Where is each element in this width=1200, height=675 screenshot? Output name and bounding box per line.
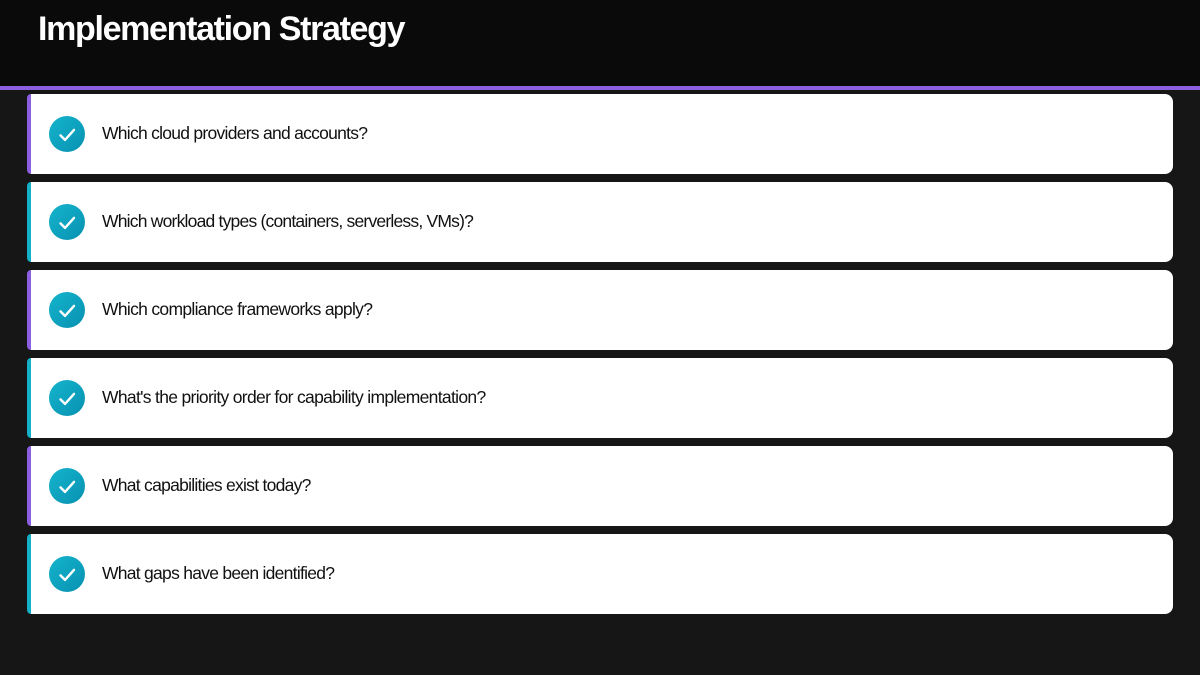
question text: Which workload types (containers, serverless, VMs)? xyxy=(102,211,473,231)
panel: card 3 xyxy=(27,270,1173,350)
question text: Which compliance frameworks apply? xyxy=(102,299,372,319)
icon: check circle xyxy=(49,380,85,416)
panel: card 1 xyxy=(27,94,1173,174)
panel: card 5 xyxy=(27,446,1173,526)
icon: check circle xyxy=(49,556,85,592)
question text: What's the priority order for capability implementation? xyxy=(102,387,486,407)
header bar xyxy=(0,0,1200,90)
icon: check circle xyxy=(49,292,85,328)
panel: card 2 xyxy=(27,182,1173,262)
icon: check circle xyxy=(49,468,85,504)
question text: What gaps have been identified? xyxy=(102,563,334,583)
title: Implementation Strategy xyxy=(38,10,404,48)
question text: Which cloud providers and accounts? xyxy=(102,123,367,143)
icon: check circle xyxy=(49,116,85,152)
question text: What capabilities exist today? xyxy=(102,475,311,495)
panel: card 4 xyxy=(27,358,1173,438)
icon: check circle xyxy=(49,204,85,240)
panel: card 6 xyxy=(27,534,1173,614)
